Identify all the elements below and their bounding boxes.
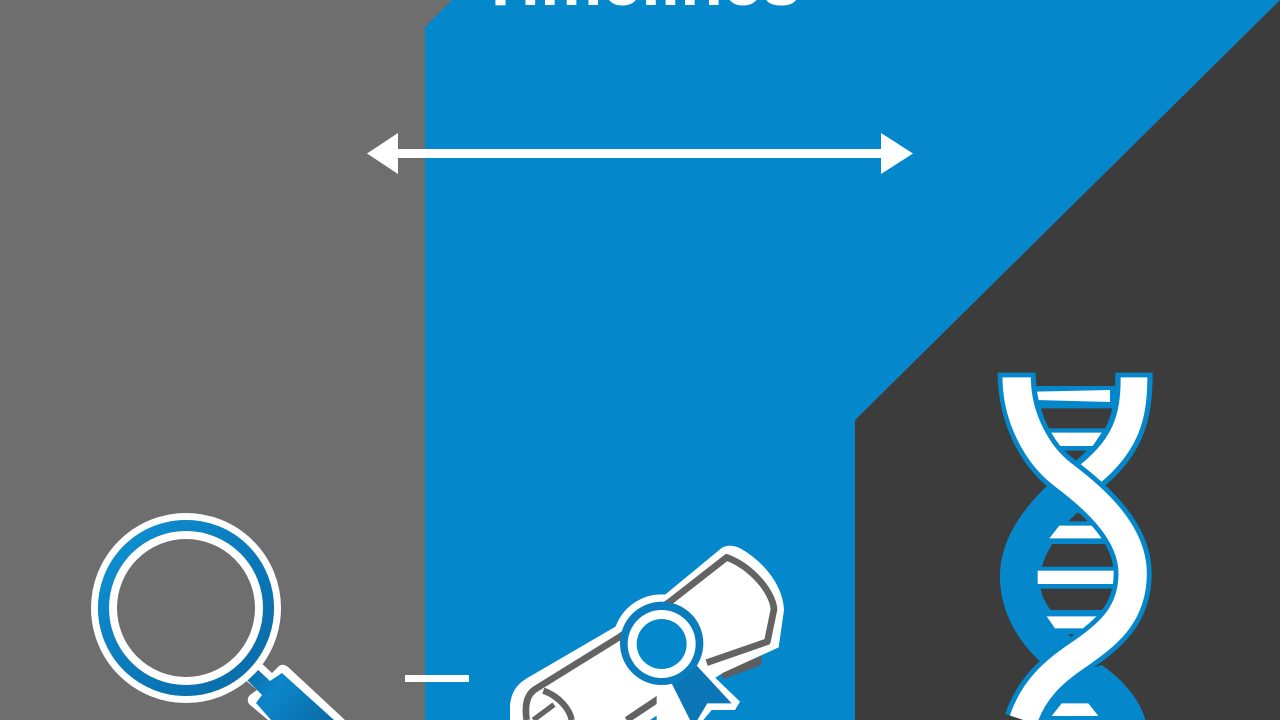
arrow: double-headed [367, 133, 913, 174]
dash [405, 675, 469, 682]
rungs [1033, 386, 1120, 716]
strand front [1017, 373, 1133, 720]
seal [620, 602, 703, 685]
icon: DNA helix [1000, 373, 1145, 720]
strand back [1080, 373, 1134, 482]
ribbon [656, 666, 740, 720]
lower blue lobe [1040, 665, 1145, 720]
icon: diploma scroll with seal [510, 546, 784, 720]
panel: blue centre [425, 0, 1280, 720]
lower left blue lobe [1000, 486, 1079, 661]
panel: dark right background [855, 0, 1280, 720]
icon: magnifying glass [94, 516, 345, 720]
